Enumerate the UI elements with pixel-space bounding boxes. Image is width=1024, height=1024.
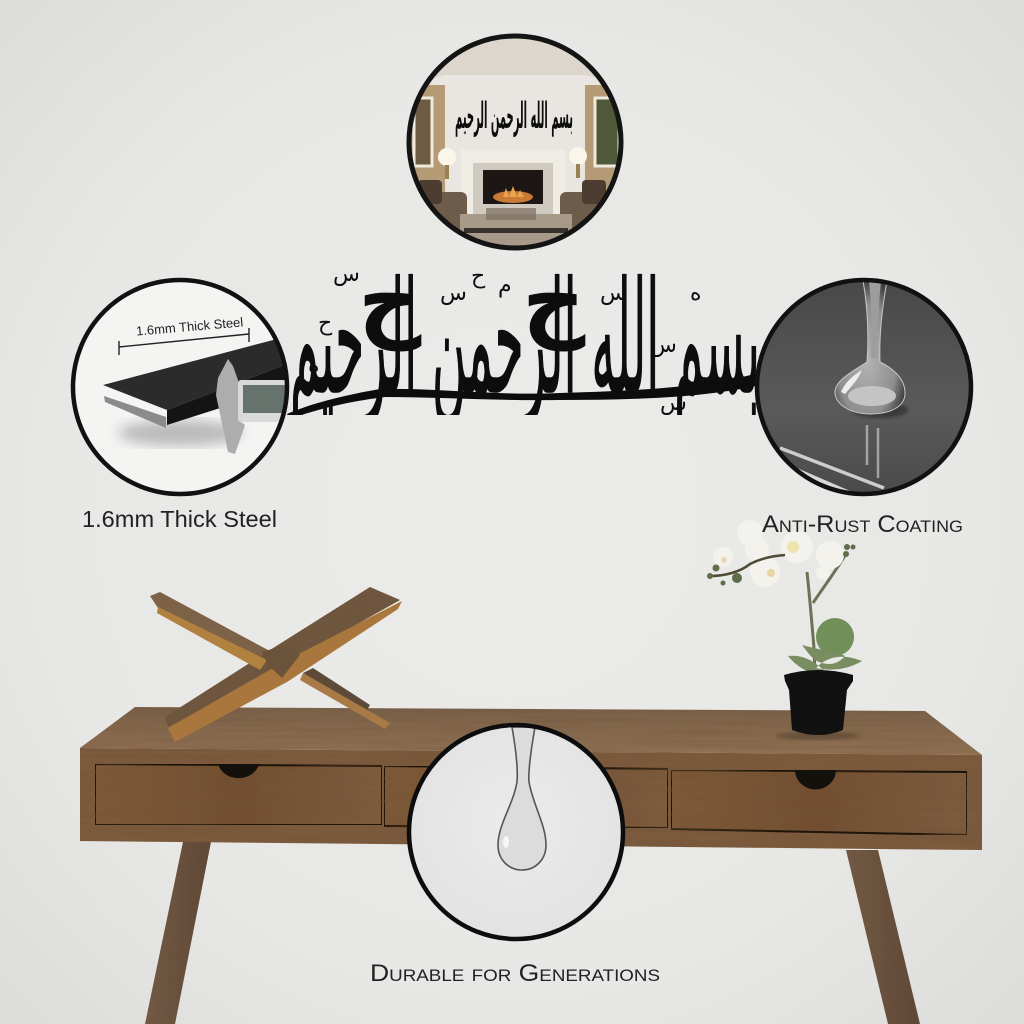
label: anti-rust coating: Anti-Rust Coating xyxy=(762,511,963,538)
drawer 3 xyxy=(671,770,967,835)
front frame xyxy=(80,748,982,850)
wall calligraphy: م xyxy=(498,273,512,298)
wall calligraphy: س xyxy=(650,333,677,358)
text: بسم الله الرحمن الرحيم xyxy=(455,96,573,137)
wall calligraphy: س xyxy=(440,281,467,306)
orchid plant xyxy=(707,520,862,735)
circle: room with fireplace xyxy=(405,35,625,254)
wall calligraphy: ح xyxy=(318,311,333,336)
pot xyxy=(784,670,853,735)
wooden desk xyxy=(80,707,982,1024)
wall calligraphy xyxy=(287,272,756,415)
water droplet with stem xyxy=(835,280,905,414)
tabletop xyxy=(80,707,982,755)
circle: water drop xyxy=(409,725,623,939)
wall calligraphy: ه xyxy=(690,281,702,306)
wooden book stand xyxy=(150,587,402,742)
wall calligraphy: ح xyxy=(358,248,422,351)
wall calligraphy: ح xyxy=(522,248,586,351)
drawer 1 xyxy=(95,764,382,825)
drawer 2 xyxy=(384,766,668,828)
legs xyxy=(145,842,211,1024)
circle: anti-rust coating xyxy=(755,278,975,500)
wall calligraphy: ح xyxy=(471,264,486,289)
wall calligraphy: ه xyxy=(308,353,320,378)
wall calligraphy: س xyxy=(600,281,627,306)
label: durable for generations: Durable for Generations xyxy=(370,960,660,987)
wall calligraphy: س xyxy=(660,391,687,416)
circle: 1.6mm thick steel xyxy=(73,280,292,494)
wall calligraphy: س xyxy=(333,262,360,287)
label on steel: 1.6mm Thick Steel xyxy=(135,314,244,339)
label: 1.6mm thick steel: 1.6mm Thick Steel xyxy=(82,506,277,532)
